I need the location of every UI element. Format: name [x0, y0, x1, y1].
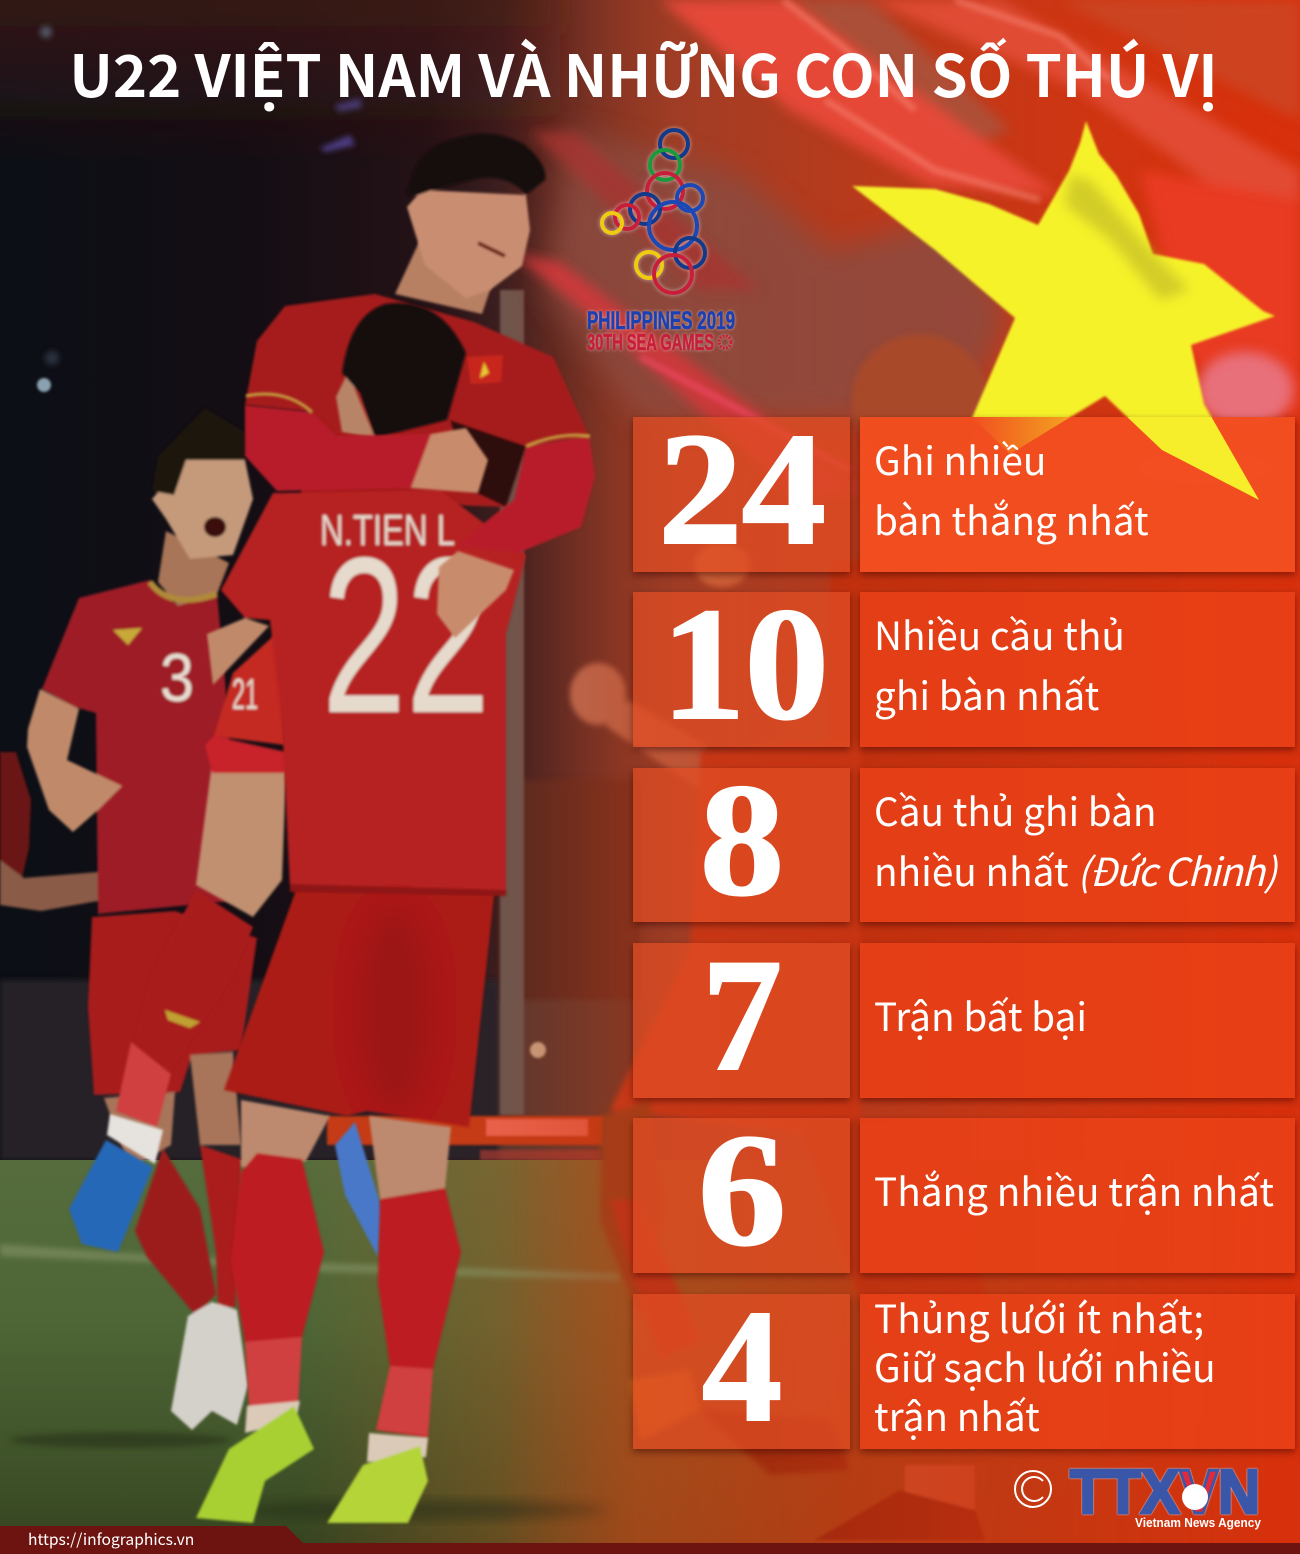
flag streaks — [514, 0, 1300, 500]
stat row 4 text panel: Trận bất bại — [874, 987, 1087, 1043]
background players on the right, faded — [570, 543, 1190, 1475]
stat row 6 number panel — [633, 1294, 850, 1449]
jumping player legs — [69, 630, 382, 1257]
stat row 6 number panel: 4 — [702, 1277, 781, 1455]
stat row 6 text panel — [860, 1294, 1295, 1449]
TTXVN logo: Vietnam News Agency — [1135, 1516, 1261, 1530]
stat row 2 text panel: Nhiều cầu thủ — [874, 606, 1125, 662]
stat row 5 number panel — [633, 1118, 850, 1273]
copyright symbol — [1015, 1471, 1051, 1507]
stat row 1 text panel — [860, 417, 1295, 572]
stat row 5 text panel: Thắng nhiều trận nhất — [874, 1162, 1274, 1218]
bottom bar with source tab — [0, 1526, 1300, 1554]
sea games logo text: PHILIPPINES 2019 — [587, 307, 735, 335]
stat row 3 text panel — [860, 768, 1295, 922]
front player shirt and shorts number 22: N.TIEN L — [320, 506, 455, 555]
stat row 4 number panel — [633, 943, 850, 1098]
right side red wash — [500, 0, 1300, 1554]
title: U22 VIỆT NAM VÀ NHỮNG CON SỐ THÚ VỊ — [69, 30, 1218, 114]
stat row 4 text panel — [860, 943, 1295, 1098]
sea games logo text: 30TH SEA GAMES — [587, 329, 714, 355]
stat row 1 text panel: bàn thắng nhất — [874, 491, 1149, 547]
stat row 1 number panel: 24 — [658, 400, 825, 578]
stat row 2 number panel: 10 — [661, 575, 828, 753]
stat row 6 text panel: trận nhất — [874, 1386, 1040, 1442]
stat row 3 number panel: 8 — [700, 751, 783, 929]
stat row 1 number panel — [633, 417, 850, 572]
stat row 6 text panel: Thủng lưới ít nhất; — [874, 1288, 1204, 1344]
front player shirt and shorts number 22: 22 — [322, 512, 490, 760]
player 3 on the left — [0, 408, 257, 1430]
stat row 6 text panel: Giữ sạch lưới nhiều — [874, 1338, 1216, 1394]
stat row 3 text panel: Cầu thủ ghi bàn — [874, 782, 1157, 838]
stat row 3 text panel: nhiều nhất (Đức Chinh) — [874, 842, 1276, 898]
stat row 2 number panel — [633, 592, 850, 747]
sea games logo text — [587, 307, 735, 355]
jumper torso — [245, 240, 589, 507]
player 3 on the left: 3 — [160, 640, 194, 716]
pink flag highlights — [1130, 352, 1293, 488]
blurred head of player behind the star — [852, 334, 988, 466]
stat row 2 text panel: ghi bàn nhất — [874, 666, 1099, 722]
stat row 2 text panel — [860, 592, 1295, 747]
stadium lights and hoardings — [0, 26, 640, 1160]
grass pitch — [0, 1160, 1300, 1554]
front player head — [336, 303, 466, 438]
sea games logo rings — [602, 130, 705, 293]
stat row 4 number panel: 7 — [702, 926, 781, 1104]
stat row 5 text panel — [860, 1118, 1295, 1273]
jumper arms hugging — [245, 394, 595, 638]
front player shirt and shorts number 22 — [196, 490, 526, 1523]
stat row 3 number panel — [633, 768, 850, 922]
source url: https://infographics.vn — [28, 1528, 194, 1550]
jumping player legs: 21 — [232, 670, 258, 719]
stat row 1 text panel: Ghi nhiều — [874, 431, 1046, 487]
jumper head — [407, 134, 545, 298]
stat row 5 number panel: 6 — [698, 1101, 785, 1279]
TTXVN logo: TTXVN — [1070, 1458, 1260, 1527]
flag star — [852, 121, 1275, 500]
brown out-of-focus patch of the flag area — [545, 130, 1010, 420]
